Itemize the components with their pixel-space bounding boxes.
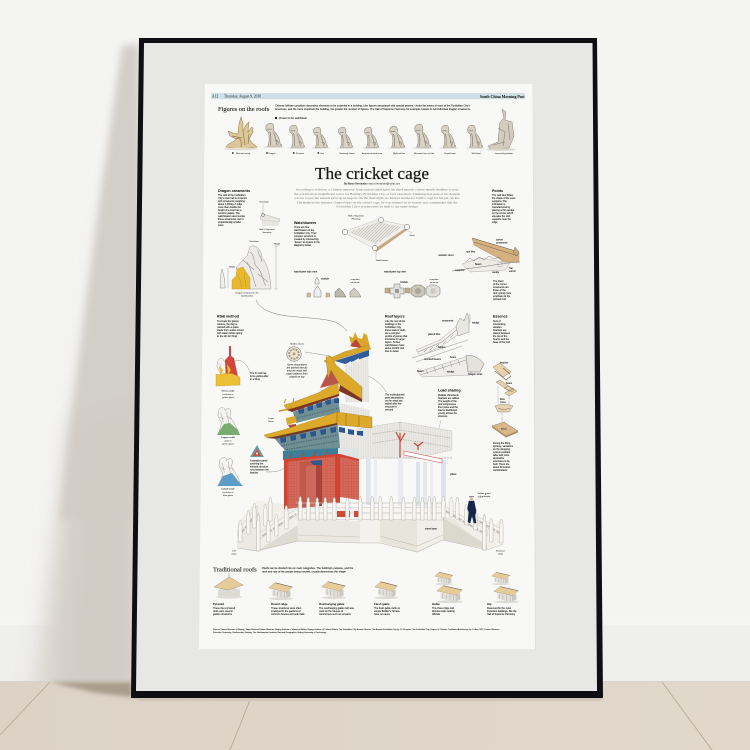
ornament: iron oxide yellow: in a firing: [250, 378, 261, 381]
diagram: roof corner wedge: Tail: [509, 267, 513, 270]
intro text: figures: Chinese folklore considers decorative elements to be essential in a building. Like figures associated with special powers. Under the eaves of most of the Forbidden City's: [275, 104, 471, 108]
text: watchtowers: complex structure is: [294, 235, 316, 238]
panel: dragon ornaments: [218, 189, 281, 298]
diagram: hall of supreme harmony: Harmony: [263, 231, 272, 234]
diagram: bracket components: Bow: [500, 398, 505, 401]
roof: round ridge: employed in the gardens of: [271, 610, 301, 613]
diagram: dragon ornament: Height: [274, 242, 281, 246]
text: roof layers: watchtowers have: [385, 344, 405, 347]
figure: phoenix rider: [224, 117, 258, 150]
poster sheet: [199, 84, 536, 649]
text: watchtowers: watchtowers in the: [294, 229, 315, 232]
upper white walls: [345, 350, 369, 402]
text: roof layers: tiles in detail: [385, 350, 399, 353]
platform front faces: [298, 519, 360, 543]
top roof and finial: [349, 332, 370, 347]
callout: multicoloured paint: structure is: [385, 406, 398, 408]
panel: golden shoots: Golden shoots: [290, 342, 305, 346]
roof: overhanging gable: used on the houses of: [319, 610, 343, 613]
figure labels: Lion: [320, 153, 325, 155]
figure labels: [232, 152, 514, 155]
panel: golden shoots: onto the wood with: [287, 370, 308, 372]
icon: guard figure: Soldier guard: [477, 492, 491, 495]
text: essence caption: system enabled: [493, 451, 511, 454]
map: forbidden city plan: Moat: [410, 234, 415, 237]
callout: multicoloured paint: paint decorations: [385, 396, 404, 400]
text: points caption: The lower: [493, 280, 504, 283]
text: roof layers: intertwine in larger: [385, 338, 405, 341]
illustration: pavilion: [346, 422, 457, 506]
diagram: watchtower side view: complete: [351, 278, 360, 281]
label: lower floors: floors: [268, 420, 275, 423]
header band: A12: [212, 95, 218, 99]
label: lower floors: Lower: [268, 417, 274, 420]
roof: flush gable: The flush gable roofs on: [374, 607, 401, 610]
text: essence caption: combinations: [493, 469, 508, 472]
text: dragon ornaments: City's main hall is crowned: [218, 197, 247, 200]
text: dragon ornaments: ceramic palace. The: [218, 212, 241, 215]
text: dragon ornaments: proportionally smaller: [218, 221, 241, 224]
text: RGB method: made from oxides mixed: [217, 329, 244, 332]
text: roof layers: layers. All four: [385, 341, 400, 344]
diagram: dragon ornament: watchtowers: [241, 294, 254, 298]
roof: gable: Gable: [432, 602, 440, 606]
figure labels: Mounted rising: [236, 152, 251, 155]
text: RGB method: with water before going: [217, 332, 243, 335]
text: essence: placed between: [493, 332, 511, 335]
callout: multicoloured paint: on the wood are: [385, 400, 403, 402]
text: dragon ornaments: more than double the: [218, 206, 242, 209]
diagram: bracket components: cross: [500, 401, 507, 404]
roof: flush gable: [374, 582, 401, 616]
text: essence caption: taller and more: [493, 454, 510, 457]
panel: golden shoots: [286, 342, 330, 378]
roof: overhanging gable: The overhanging gable roof was: [319, 607, 355, 610]
intro text: figures: structures, and the more important the building, the greater the number of figures. The Hall of Supreme Harmony, for example, boasts its full individual dragon ornaments.: [275, 107, 471, 111]
heading: RGB method: RGB method: [217, 314, 239, 318]
roof: hip: Reserved for the most: [487, 607, 511, 610]
figures: roof beasts: [263, 123, 485, 149]
heading: traditional roofs: Traditional roofs: [213, 566, 257, 574]
panel: RGB method: [216, 314, 284, 497]
byline: By Marco Hernandez marco.hernandez@scmp.com: [344, 183, 400, 186]
roof: gable: [432, 572, 463, 616]
figure labels: Heavenly horse: [339, 152, 355, 155]
map: forbidden city plan: [342, 214, 415, 262]
text: load sharing: The weight of the: [438, 400, 457, 403]
diagram: dragon ornament: Yuhuidian: [249, 241, 260, 243]
figure labels: Tail beast: [471, 152, 481, 155]
icon: guard figure: [468, 492, 491, 523]
illustration: watchtower: [264, 332, 372, 510]
panel: golden shoots: paper patterns then: [286, 372, 308, 376]
text: essence caption: During the Ming: [493, 442, 511, 445]
diagram: roof layers exploded: rounded beams: [424, 358, 442, 361]
icon: guard figure: in the temple: [478, 495, 491, 498]
diagram: roof corner wedge: roof tiles: [466, 250, 476, 254]
diagram: watchtower top view: complete: [430, 278, 439, 281]
heading: points: Points: [492, 189, 503, 193]
text: watchtowers: "boxes" as shown in the: [294, 241, 320, 244]
roof: round ridge: Round ridge: [271, 602, 288, 606]
heading: essence: Essence: [493, 314, 508, 318]
roof: hip: Hall of Supreme Harmony: [487, 613, 516, 616]
ornament: copper oxide green: Copper oxide: [221, 437, 236, 439]
text: essence: beams and the: [493, 338, 510, 341]
text: points: supports. The: [492, 200, 508, 203]
text: load sharing: their joints and the: [438, 406, 459, 409]
text: points caption: of the corner: [493, 283, 507, 286]
diagram: dragon ornament: [220, 241, 281, 298]
left stair: [237, 500, 298, 551]
text: roof layers: puzzle of pieces that: [385, 335, 408, 338]
illustration: pavilion: pillars: [450, 473, 457, 476]
roof: flush gable: simple Builder's Terrace: [374, 610, 400, 613]
diagram: watchtower top view: watchtower top view: [384, 270, 406, 274]
diagram: hall of supreme harmony: Hall of Supreme: [259, 228, 276, 231]
text: points: edge: [492, 221, 498, 224]
gable: [320, 366, 340, 388]
figure labels: Phoenix: [296, 153, 305, 155]
roof: pyramid: These four-cornered: [213, 607, 236, 610]
diagram: roof layers exploded: wedge: [472, 322, 480, 324]
figure labels: Royal beast: [444, 152, 456, 155]
roof: pyramid: roofs were used in: [213, 610, 234, 613]
heading: load sharing: Load sharing: [438, 388, 461, 392]
roof: pyramid: garden structures: [213, 613, 233, 616]
text: watchtowers: created by intersecting: [294, 238, 319, 241]
roof: round ridge: [269, 583, 305, 616]
intro text: The moment the emperor clapped eyes on the cricket cage, he was stunned by its beauty and commanded that the: [297, 200, 458, 205]
diagram: watchtower side view: structure: [351, 281, 360, 284]
diagram: roof layers exploded: glazed tiles: [428, 333, 441, 336]
panel: load sharing: [438, 388, 461, 432]
text: points: The roof tiles follow: [492, 194, 513, 197]
text: essence caption: dynasty, variations: [493, 445, 514, 448]
diagram: hall of supreme harmony: [259, 202, 280, 234]
text: points: inclination is: [492, 203, 506, 206]
illustration: watchtower base: Entrance: [496, 550, 506, 552]
icon: warning panel: internal structure: [250, 466, 269, 468]
diagram: watchtower side view: watchtower side view: [294, 270, 317, 274]
text: essence: brackets are: [493, 329, 507, 332]
diagram: bracket components: Beam: [501, 428, 507, 430]
text: dragon ornaments: watchtowers also involve: [218, 215, 246, 218]
panel: golden shoots: are painted directly: [287, 366, 308, 370]
callout: multicoloured paint: [346, 372, 405, 412]
diagram: roof corner wedge: Beam: [475, 263, 481, 266]
panel: traditional roofs: [213, 566, 519, 616]
text: essence: wooden: [493, 326, 502, 329]
panel: golden shoots: Some decorations: [287, 364, 308, 366]
header band: [211, 93, 525, 100]
text: RGB method: to the kiln for firing: [217, 335, 238, 338]
map: forbidden city plan: Watchtowers: [376, 259, 389, 262]
text: points: placing a thin wedge: [492, 209, 515, 212]
text: essence caption: built. There are: [493, 463, 510, 466]
ornament: copper oxide green: green glaze: [222, 442, 234, 446]
ornament: iron oxide yellow: Heron-oxide: [222, 390, 235, 392]
text: load sharing: load is distributed: [438, 409, 458, 412]
figure labels: Dragon: [268, 152, 276, 155]
text: RGB method: To create the glossy: [217, 320, 239, 323]
source note: Princeton University; Smithsonian; Nanjing, The Northeastern Institute; National Geographic; Beijing University of Technology: [213, 631, 327, 634]
ornament: cobalt oxide blue: Cobalt oxide: [221, 488, 235, 490]
text: RGB method: painted with a paste: [217, 326, 239, 329]
ornament: iron oxide yellow: yellow glaze: [222, 397, 235, 399]
diagram: roof layers exploded: Beam: [417, 370, 423, 373]
panel: figures on the roofs: [218, 104, 516, 155]
text: dragon ornaments: The roof of the Forbidden: [218, 194, 246, 197]
text: dragon ornaments: about 4,300kg. A ridge: [218, 203, 243, 206]
text: load sharing: evenly across the: [438, 412, 458, 415]
text: roof layers: Forbidden City,: [385, 326, 402, 329]
intro text: According to folklore, a Chinese emperor from ancient times gave the chief eunuch a three-month deadline to plan: [296, 188, 459, 192]
heading: dragon ornaments: Dragon ornaments: [218, 189, 250, 193]
diagram: watchtower top view: structure: [430, 281, 439, 284]
intro text: was up to par, the eunuch gave up in despair. On the final night, he instead decided to build a cage for his pet cricket.: [294, 196, 460, 201]
heading: roof layers: Roof layers: [385, 314, 405, 318]
diagram: hall of supreme harmony: Yuhuidian: [259, 202, 270, 204]
ornament: iron oxide yellow: produces a: [223, 393, 234, 396]
illustration: balustrades: [238, 496, 503, 551]
diagram: bracket components: [492, 362, 518, 438]
title: The cricket cage: [315, 164, 429, 183]
panel: roof layers: [385, 313, 484, 377]
text: points: elevates the roof: [492, 215, 510, 218]
frame shadow on wall: [30, 44, 139, 720]
red walls: [284, 455, 336, 509]
ornament: cobalt oxide blue: produces a: [223, 491, 234, 494]
legend: present on watchtowers: Present in the watchtower: [279, 117, 307, 120]
ornament: iron oxide yellow: The tin coil has: [250, 372, 267, 375]
text: points caption: emphasis to the: [493, 295, 511, 298]
source note: Source: Palace Museum of Beijing, Taipei National Palace Museum, Beijing Institute of Historical Relics; Beijing Institute of Cultural Relics; The Forbidden City, Ancient Bronze; The Ancient Forbidden City by Yu Zhuoyun; The Forbidden City; Origins of Chinese Traditional Architecture by Lu Bao, MIT; Yunnan Museum: [213, 628, 500, 631]
illustration: watchtower base: [231, 500, 506, 556]
text: roof layers: about 10,000 roof: [385, 347, 404, 350]
diagram: roof corner wedge: corner: [509, 270, 516, 273]
text: load sharing: Multiple chinoiserie: [438, 394, 459, 397]
text: points caption: those of the: [493, 289, 506, 292]
text: dragon ornaments: sizes: [218, 224, 224, 227]
upper roof: [284, 383, 339, 410]
diagram: roof corner wedge: [438, 238, 520, 274]
diagram: watchtower top view: module: [400, 281, 409, 284]
lower eaves: [275, 425, 340, 452]
roof: hip: Hip: [487, 602, 492, 606]
curve: dragon ornament leader: [256, 300, 347, 331]
heading: watchtowers: Watchtowers: [294, 221, 316, 225]
diagram: watchtower top view: [384, 270, 440, 298]
text: essence caption: decorative: [493, 457, 505, 460]
roof: pyramid: Pyramid: [213, 602, 224, 606]
diagram: roof corner wedge: ornaments: [496, 242, 508, 244]
icon: painted rosette: [287, 347, 301, 361]
icon: warning panel: bracket: [250, 472, 258, 474]
diagram: roof corner wedge: wooden cover: [438, 254, 454, 257]
text: load sharing: roof compresses: [438, 403, 457, 406]
text: essence caption: structures to be: [493, 460, 510, 463]
roof: round ridge: common houses and side halls: [271, 613, 305, 616]
callout: multicoloured paint: erected: [385, 408, 394, 412]
text: traditional roofs intro: Roofs can be divided into six main categories. The building's purpose, and the: [262, 566, 354, 570]
figure: seated immortal: [486, 109, 516, 151]
panel: points: [438, 189, 520, 301]
right stair: [443, 516, 487, 548]
roof: overhanging gable: Overhanging gable: [319, 602, 345, 606]
text: essence: base of the roof: [493, 341, 510, 344]
diagram: roof layers exploded: beam: [450, 356, 456, 359]
text: essence: Sets of: [493, 320, 501, 323]
roof: pyramid: [213, 573, 243, 616]
intro text: Forbidden City's watchtowers be built to the same design: [336, 205, 418, 209]
map: forbidden city plan: Hall of Supreme: [348, 214, 365, 218]
text: essence caption: on the dougong: [493, 448, 511, 451]
text: traditional roofs intro: rank and role of the people being housed, usually determines the shape: [262, 570, 346, 574]
diagram: bracket components: bracket: [500, 362, 508, 364]
panel: watchtowers: [294, 214, 440, 298]
icon: warning panel: covering the: [250, 462, 264, 466]
header band: South China Morning Post: [480, 95, 525, 99]
figure labels: Auspicious seahorse: [362, 152, 383, 155]
text: roof layers: these towers' roofs: [385, 329, 406, 332]
text: points caption: roof, giving more: [493, 292, 512, 295]
panel: essence: [492, 314, 518, 472]
roof: gable: denotes high-ranking: [432, 610, 455, 613]
diagram: watchtower side view: [294, 270, 361, 297]
ornament: cobalt oxide blue: [217, 458, 243, 497]
text: points caption: ornaments are: [493, 286, 509, 289]
roof: hip: important buildings, like the: [487, 610, 517, 613]
text: essence caption: about 30 known: [493, 466, 511, 469]
roof: flush gable: Flush gable: [374, 602, 390, 606]
icon: warning panel: A wooden panel: [250, 460, 268, 462]
painted beam: [283, 448, 338, 460]
text: dragon ornaments: these ornaments, but in: [218, 218, 244, 221]
figure labels: Mythical lion: [393, 152, 406, 155]
text: points: supports near the: [492, 218, 512, 221]
text: load sharing: structure: [438, 415, 448, 418]
roof: gable: This three-ridge roof: [432, 607, 454, 610]
small middle eave: [286, 416, 297, 425]
text: essence: interlocking: [493, 323, 506, 326]
diagram: roof layers exploded: ornaments: [442, 320, 454, 322]
ornament: iron oxide yellow: [216, 346, 269, 399]
text: roof layers: are a complex: [385, 332, 401, 335]
text: points: the shape of the eave: [492, 197, 516, 200]
text: RGB method: colours, the clay is: [217, 323, 238, 326]
text: points: manufactured by: [492, 206, 511, 209]
text: watchtowers: Forbidden City. Their: [294, 232, 317, 235]
frame shadow on floor: [50, 682, 132, 697]
diagram: dragon ornament: Dragon ornament in the: [236, 292, 259, 294]
picture frame: [131, 38, 603, 698]
callout: multicoloured paint: The multicoloured: [385, 394, 405, 396]
diagram: roof layers exploded: wedge: [447, 370, 455, 374]
header band: Thursday, August 9, 2018: [224, 95, 261, 100]
illustration: watchtower base: steps: [498, 552, 504, 556]
icon: warning panel: [250, 445, 284, 474]
text: points: on the corner which: [492, 212, 514, 215]
diagram: roof corner wedge: corner: [496, 238, 503, 242]
illustration: watchtower base: stone base: [425, 528, 438, 530]
diagram: roof corner wedge: wedge: [492, 271, 500, 274]
ornament: iron oxide yellow: turns yellow after: [250, 375, 269, 378]
upper tier eaves: [293, 397, 340, 423]
heading: figures on the roofs: Figures on the roofs: [218, 106, 270, 113]
illustration: watchtower base: stairs: [231, 552, 238, 556]
roof: overhanging gable: commoners such as servants: [319, 613, 351, 616]
text: load sharing: brackets are added.: [438, 397, 460, 400]
figure labels: Immortal guardian: [495, 152, 514, 155]
text: dragon ornaments: with ornaments weighing: [218, 200, 245, 203]
figure labels: Mountain lion on fish: [414, 152, 435, 155]
diagram: watchtower side view: module: [321, 278, 330, 280]
callout: multicoloured paint: added after the: [385, 402, 402, 406]
icon: warning panel: runs between the: [250, 468, 269, 472]
ornament: copper oxide green: gives a: [225, 440, 232, 442]
intro text: the world's most magnificent tower for Beijing's Forbidden City, or face execution. Thinking that none of his designs: [294, 192, 461, 197]
roof: flush gable: have no eaves: [374, 613, 391, 616]
map: forbidden city plan: Harmony: [352, 218, 361, 220]
diagram: dragon ornament: Height: [229, 266, 236, 268]
text: watchtowers: There are four: [294, 226, 310, 229]
panel: golden shoots: placed on top: [290, 376, 305, 378]
text: roof layers: Like the rest of the: [385, 320, 406, 323]
roof: hip: [487, 572, 519, 616]
diagram: roof layers exploded: Dragon ovals: [468, 373, 483, 376]
text: essence: the top of the: [493, 335, 508, 338]
text: watchtowers: diagrams below: [294, 244, 311, 247]
diagram: roof layers exploded: [412, 313, 484, 377]
ornament: cobalt oxide blue: blue glaze: [223, 495, 234, 497]
ornament: copper oxide green: [217, 408, 240, 446]
lower roof: [264, 412, 372, 438]
roof: round ridge: These structures were often: [271, 607, 302, 610]
text: points caption: pointed roof: [493, 298, 506, 301]
diagram: bracket components: brace: [506, 382, 513, 385]
text: dragon ornaments: height of a man has a: [218, 209, 242, 212]
illustration: watchtower base: Left: [232, 550, 236, 552]
diagram: roof corner wedge: supports: [455, 269, 465, 272]
diagram: roof layers exploded: hidden: [438, 346, 446, 349]
text: roof layers: buildings in the: [385, 323, 402, 326]
roof: overhanging gable: [319, 582, 355, 616]
roof: gable: officials: [432, 613, 441, 616]
